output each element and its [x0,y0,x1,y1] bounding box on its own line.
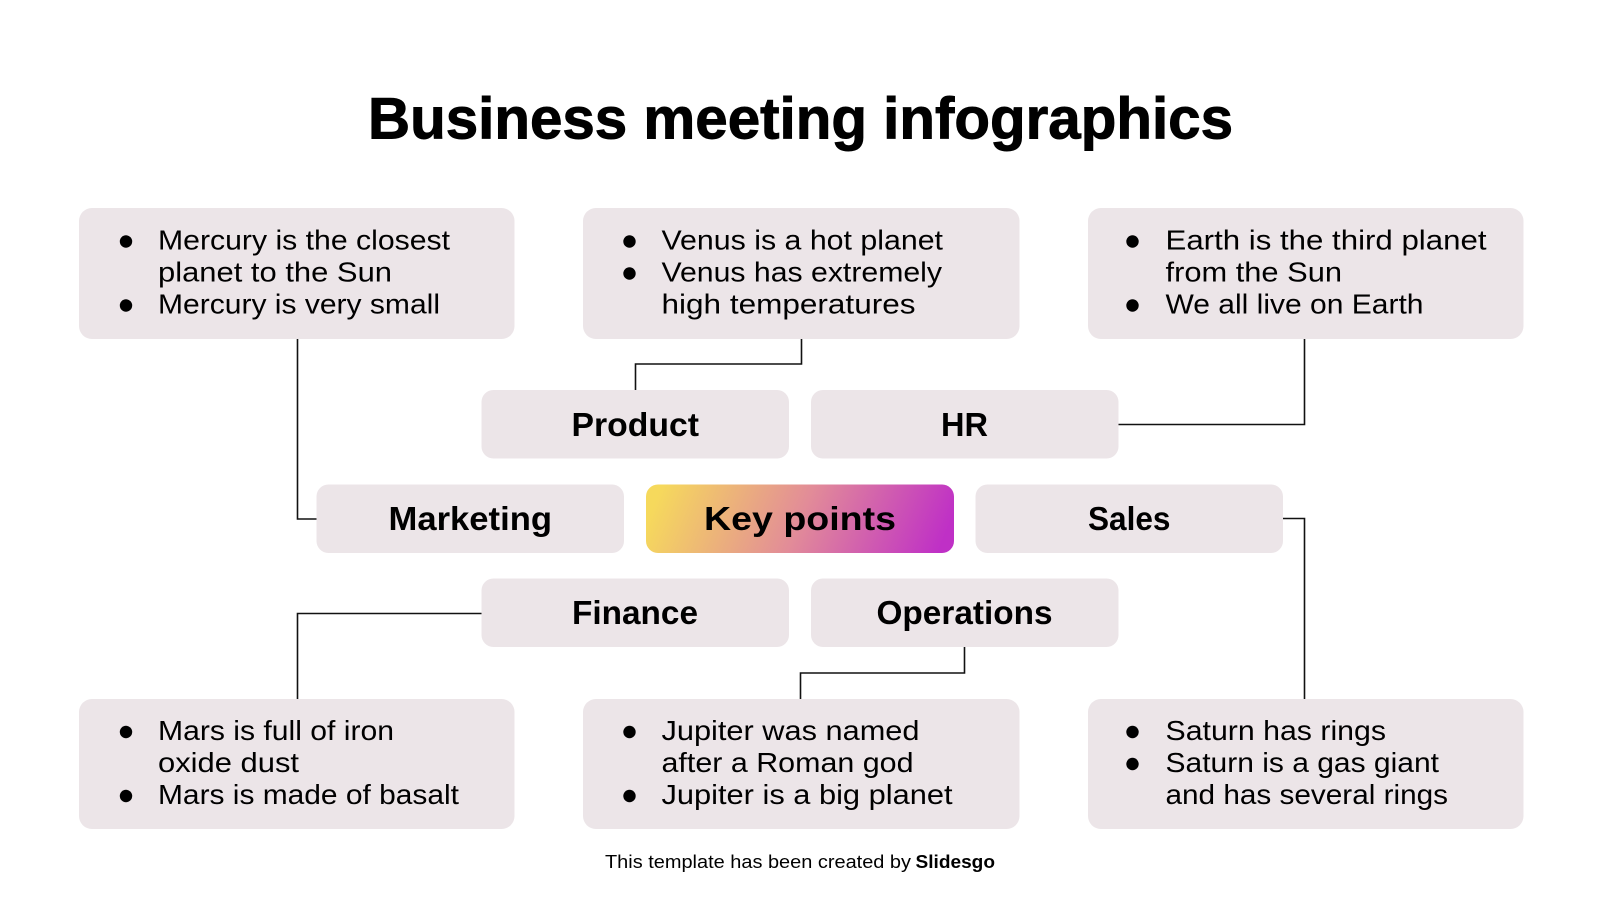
connector: Mercury to Marketing [298,339,316,519]
label: Sales [976,484,1283,553]
panel: Jupiter: Jupiter is a big planet [662,779,953,810]
panel: Venus: Venus is a hot planet [662,224,943,256]
panel: Venus: Venus has extremely [662,256,942,288]
label: Operations [811,578,1118,647]
panel: Earth: Earth is the third planet [1166,224,1487,256]
connector: Operations to Jupiter [800,647,964,699]
label: Finance [482,578,789,647]
label: Operations: Operations [876,594,1052,631]
panel: Saturn: Saturn is a gas giant [1166,747,1439,778]
connector: Venus to Product [636,339,802,390]
label: Key points: Key points [704,500,896,537]
panel: Jupiter [583,699,1020,829]
panel: Jupiter: after a Roman god [662,747,914,778]
panel: Saturn: and has several rings [1166,779,1448,810]
footer credit: This template has been created by [605,851,912,872]
panel: Mars: oxide dust [158,747,299,778]
label: HR [811,390,1118,458]
panel: Mercury [79,208,514,339]
panel: Mercury: Mercury is very small [158,288,440,320]
panel: Saturn: Saturn has rings [1166,715,1386,746]
label: Product: Product [572,406,699,443]
label: Sales: Sales [1088,500,1170,537]
label: Marketing [316,484,624,553]
connector: Earth to HR [1118,339,1304,424]
footer credit: Slidesgo [916,851,995,872]
label: Product [482,390,789,458]
label: Finance: Finance [572,594,698,631]
panel: Saturn [1088,699,1524,829]
label: Marketing: Marketing [388,500,552,537]
panel: Mercury: planet to the Sun [158,256,392,288]
panel: Jupiter: Jupiter was named [662,715,920,746]
panel: Mercury: Mercury is the closest [158,224,450,256]
label: HR: HR [941,406,988,443]
connector: Finance to Mars [298,614,482,699]
title: Business meeting infographics [368,86,1233,152]
panel: Earth [1088,208,1524,339]
panel: Venus: high temperatures [662,288,916,320]
panel: Venus [583,208,1020,339]
panel: Mars [79,699,514,829]
panel: Earth: from the Sun [1166,256,1342,288]
connector: Sales to Saturn [1283,518,1304,699]
panel: Earth: We all live on Earth [1166,288,1424,320]
label: Key points [646,484,954,553]
panel: Mars: Mars is full of iron [158,715,394,746]
panel: Mars: Mars is made of basalt [158,779,459,810]
